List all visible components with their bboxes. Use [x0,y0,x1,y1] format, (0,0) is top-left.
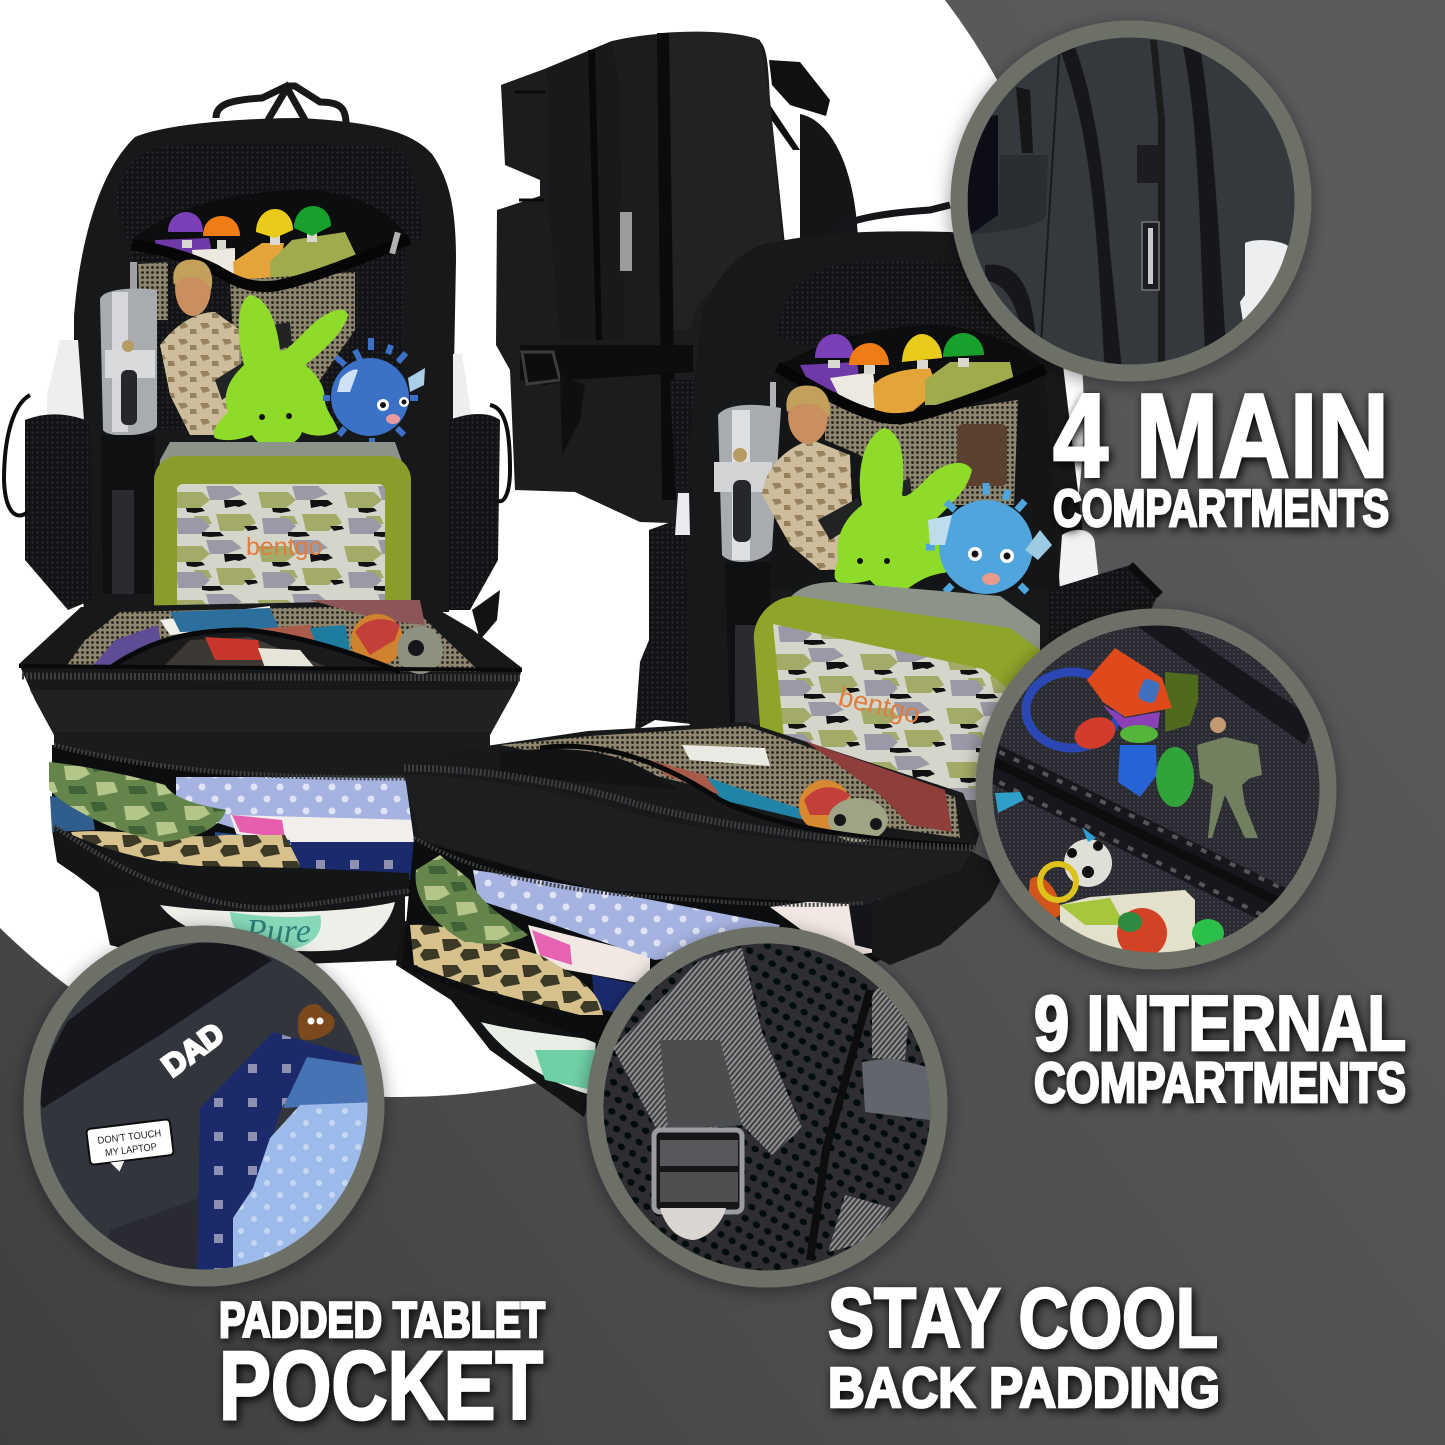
label: 9 internal compartments [1034,979,1406,1115]
callout circle: tablet pocket [30,934,380,1285]
callout circle: tablet pocket: DON'T TOUCH [97,1128,162,1147]
pocket opening [777,325,1045,420]
bottom pouch and diaper pack: Pure [245,913,311,950]
callout circle: internal compartments [984,617,1328,961]
handle [838,205,950,232]
lower zipper band [54,826,409,912]
lunch box: bentgo [836,682,923,729]
callout circle: tablet pocket: DAD [156,1016,230,1084]
top mesh panel [115,144,422,250]
label: stay cool back padding: STAY COOL [828,1271,1218,1365]
pocket opening [132,190,409,288]
left strap and back mesh [635,515,700,731]
label: padded tablet pocket: PADDED TABLET [219,1292,545,1348]
callout circle: tablet pocket: MY LAPTOP [105,1142,158,1159]
bottom pouch [396,920,610,1117]
lower mesh pocket [130,240,405,430]
top mesh [777,262,1030,345]
side pockets [675,493,1160,665]
lunch box [154,442,411,626]
lunch box [754,582,1040,800]
blue puffer toy [323,338,425,447]
action figure [762,386,912,570]
backpack: right open view [396,205,1160,1117]
callout circle: back padding [595,935,939,1279]
lunch box: bentgo [246,533,322,561]
handle [216,86,346,124]
top flap mesh [19,600,522,735]
side bottle pockets [4,340,510,610]
callout circle: main compartments [959,29,1303,373]
light saber [100,262,157,594]
strap to flap [472,590,500,640]
lower strap [872,845,1006,965]
label: stay cool back padding: BACK PADDING [828,1356,1220,1420]
food pouches [800,333,1015,418]
food pouches [155,206,356,285]
green plush [835,428,972,592]
blue puffer toy [926,483,1052,606]
action figure [160,260,292,435]
backpack: rear closed view [496,32,858,524]
backpack: left open view [4,86,522,968]
top flap [404,722,979,905]
clothes stack [49,745,420,890]
clothes stack [402,838,880,1060]
pack body [685,231,1092,730]
light saber [714,382,781,730]
label: padded tablet pocket: POCKET [219,1331,543,1440]
bottom pouch and diaper pack [98,880,405,968]
lower mesh [770,370,1060,590]
label: stay cool back padding [828,1271,1220,1420]
pack body [74,118,456,612]
mid fabric band [54,732,490,778]
label: padded tablet pocket [219,1292,545,1440]
green plush [214,295,348,448]
